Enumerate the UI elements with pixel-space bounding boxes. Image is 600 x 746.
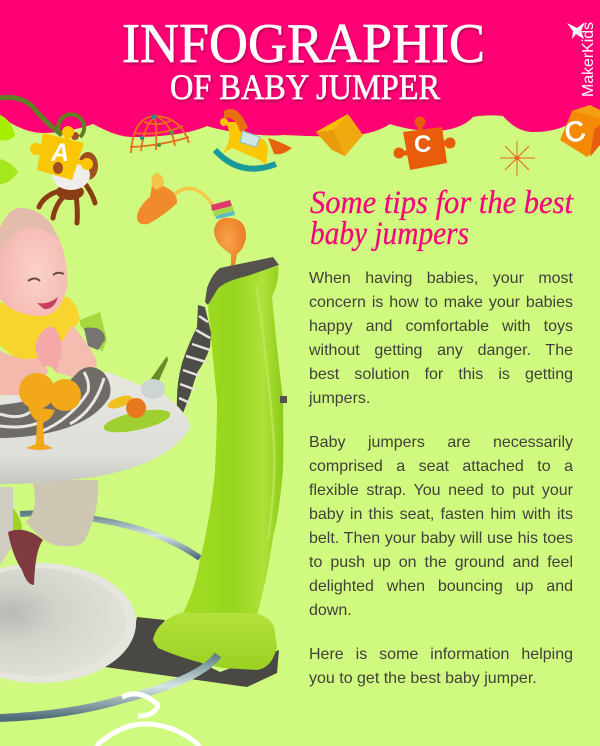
- icon: leaves: [0, 115, 18, 184]
- paragraph 3: you to get the best baby jumper.: [309, 670, 537, 687]
- title: INFOGRAPHIC: [122, 13, 485, 75]
- icon: block C: C: [562, 114, 588, 149]
- zebra fabric behind arm: [84, 328, 105, 350]
- base plate: [105, 617, 279, 687]
- icon: puzzle piece C: C: [414, 131, 431, 158]
- paragraph 1: happy and comfortable with toys: [309, 318, 573, 335]
- zebra seat ring: [0, 367, 111, 438]
- icon: monkey toy: [39, 132, 98, 223]
- pole foot: [153, 613, 277, 670]
- header banner: [0, 0, 600, 137]
- section heading: Some tips for the best: [310, 185, 574, 221]
- paragraph 2: down.: [309, 602, 352, 619]
- logo: MakerKids: MakerKids: [580, 22, 597, 97]
- paragraph 2: baby in this seat, fasten him with its: [309, 506, 573, 523]
- metal ring: back: [20, 513, 200, 558]
- icon: block C: [560, 105, 600, 157]
- paragraph 1: jumpers.: [309, 390, 370, 407]
- icon: climbing dome: [130, 114, 189, 153]
- icon: orange rattle toy: [137, 173, 246, 272]
- icon: puzzle piece A: A: [50, 139, 69, 167]
- paragraph 1: [308, 270, 573, 407]
- section heading: baby jumpers: [310, 216, 469, 252]
- paragraph 2: to push up on the ground and feel: [309, 554, 573, 571]
- icon: puzzle piece C: [394, 116, 456, 170]
- paragraph 1: concern is how to make your babies: [309, 294, 573, 311]
- title: OF BABY JUMPER: [170, 67, 440, 107]
- green pole: [182, 257, 287, 615]
- section heading: [310, 185, 574, 252]
- icon: star: [500, 141, 535, 176]
- paragraph 2: comprised a seat attached to a: [309, 458, 573, 475]
- baby trousers and foot: [0, 480, 98, 585]
- zebra strap: [177, 305, 211, 413]
- title: [122, 13, 485, 107]
- paragraph 2: flexible strap. You need to put your: [309, 482, 573, 499]
- paragraph 1: When having babies, your most: [309, 270, 573, 287]
- paragraph 3: Here is some information helping: [309, 646, 573, 663]
- icon: puzzle piece A: [30, 126, 93, 180]
- paragraph 2: Baby jumpers are necessarily: [309, 434, 573, 451]
- paragraph 1: best solution for this is getting: [309, 366, 573, 383]
- white ring decoration: [96, 694, 200, 746]
- front support: [3, 507, 22, 550]
- paragraph 2: [309, 434, 574, 619]
- metal ring: front: [0, 655, 218, 718]
- icon: rocking horse: [215, 109, 292, 169]
- icon: vine: [0, 97, 84, 137]
- tray toy cluster: [102, 356, 172, 437]
- floor disk: [0, 563, 136, 683]
- icon: cube: [316, 114, 363, 156]
- green seat back: [80, 312, 107, 352]
- paragraph 1: without getting any danger. The: [309, 342, 573, 359]
- paragraph 3: [309, 646, 573, 687]
- baby: [0, 208, 97, 395]
- logo: MakerKids: [567, 22, 597, 97]
- yellow suction toy: [19, 373, 81, 450]
- tray: [0, 372, 190, 484]
- paragraph 2: delighted when bouncing up and: [309, 578, 573, 595]
- paragraph 2: belt. Then your baby will use his toes: [309, 530, 573, 547]
